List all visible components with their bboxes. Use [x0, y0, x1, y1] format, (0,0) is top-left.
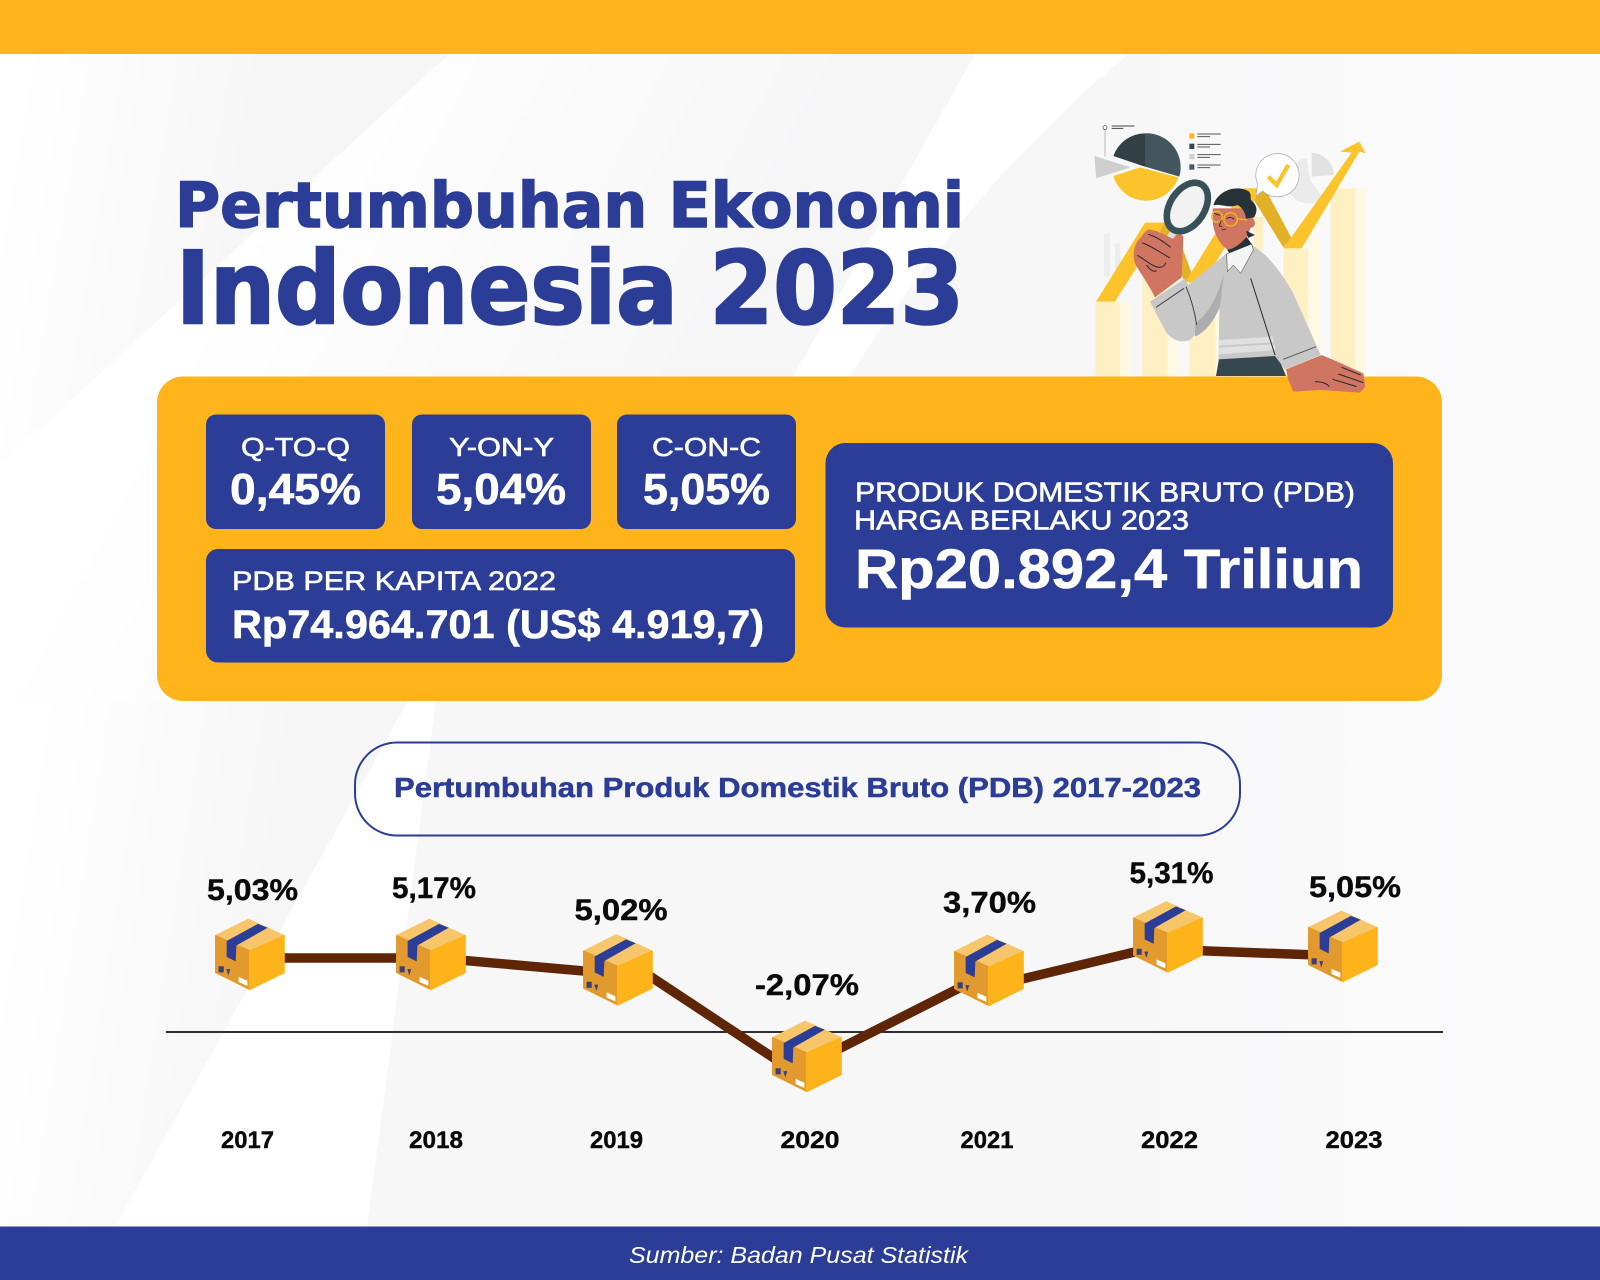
top band	[0, 0, 1600, 54]
card: Y-on-Y: Y-ON-Y	[449, 432, 554, 462]
card: PDB per kapita: PDB PER KAPITA 2022	[232, 566, 556, 596]
pie chart and legend	[1095, 126, 1221, 201]
hair	[1213, 188, 1256, 238]
title: Pertumbuhan Ekonomi	[175, 169, 964, 242]
card: PDB harga berlaku	[826, 443, 1393, 628]
chart title pill: Pertumbuhan Produk Domestik Bruto (PDB) 2017-2023	[394, 772, 1201, 803]
value labels: 5,17%	[392, 872, 476, 905]
raised hand	[1134, 229, 1183, 297]
footer band with source	[0, 1226, 1600, 1280]
value labels: 5,03%	[207, 874, 298, 907]
card: Y-on-Y: 5,04%	[436, 465, 566, 514]
illustration background: bars and charts	[1095, 142, 1366, 377]
sweater body	[1218, 245, 1321, 369]
glasses	[1212, 211, 1247, 226]
year labels: 2018	[409, 1127, 463, 1154]
resting hand	[1286, 355, 1365, 393]
card: Q-to-Q	[206, 414, 385, 529]
zero axis	[166, 1031, 1443, 1033]
pants	[1216, 353, 1286, 376]
value labels: 5,31%	[1130, 857, 1214, 890]
collar	[1227, 244, 1253, 273]
year labels: 2020	[780, 1127, 840, 1154]
line chart	[166, 857, 1443, 1154]
footer band with source: Sumber: Badan Pusat Statistik	[629, 1242, 970, 1268]
yellow panel	[157, 376, 1442, 701]
card: PDB harga berlaku: HARGA BERLAKU 2023	[854, 504, 1189, 536]
value labels: -2,07%	[755, 969, 859, 1002]
year labels: 2023	[1326, 1127, 1382, 1154]
value labels: 5,05%	[1309, 871, 1401, 904]
magnifying glass	[1154, 171, 1221, 243]
sleeve	[1150, 253, 1227, 341]
year labels: 2017	[221, 1127, 274, 1154]
growth line	[250, 944, 1343, 1080]
card: PDB per kapita: Rp74.964.701 (US$ 4.919,7)	[232, 603, 764, 647]
year labels	[221, 1127, 1382, 1154]
card: PDB harga berlaku: Rp20.892,4 Triliun	[855, 537, 1363, 600]
year labels: 2019	[590, 1127, 643, 1154]
title: Indonesia 2023	[176, 230, 964, 347]
value labels: 5,02%	[574, 894, 668, 927]
speech bubble with check	[1256, 153, 1299, 197]
year labels: 2021	[960, 1127, 1014, 1154]
card: PDB per kapita	[206, 549, 795, 662]
chart title pill	[355, 742, 1240, 836]
value labels: 3,70%	[943, 886, 1036, 920]
year labels: 2022	[1141, 1127, 1198, 1154]
person with magnifying glass	[1134, 153, 1365, 393]
card: C-on-C: C-ON-C	[652, 432, 761, 462]
value labels	[207, 857, 1401, 1002]
box markers	[216, 902, 1377, 1091]
face	[1213, 208, 1254, 249]
title	[175, 169, 964, 347]
card: Y-on-Y	[412, 414, 591, 529]
eyes and nose	[1214, 213, 1234, 230]
card: Q-to-Q: Q-TO-Q	[241, 432, 350, 462]
card: Q-to-Q: 0,45%	[230, 465, 361, 514]
neck	[1226, 236, 1253, 261]
card: PDB harga berlaku: PRODUK DOMESTIK BRUTO (PDB)	[855, 476, 1355, 508]
card: C-on-C: 5,05%	[643, 465, 770, 514]
card: C-on-C	[617, 414, 796, 529]
